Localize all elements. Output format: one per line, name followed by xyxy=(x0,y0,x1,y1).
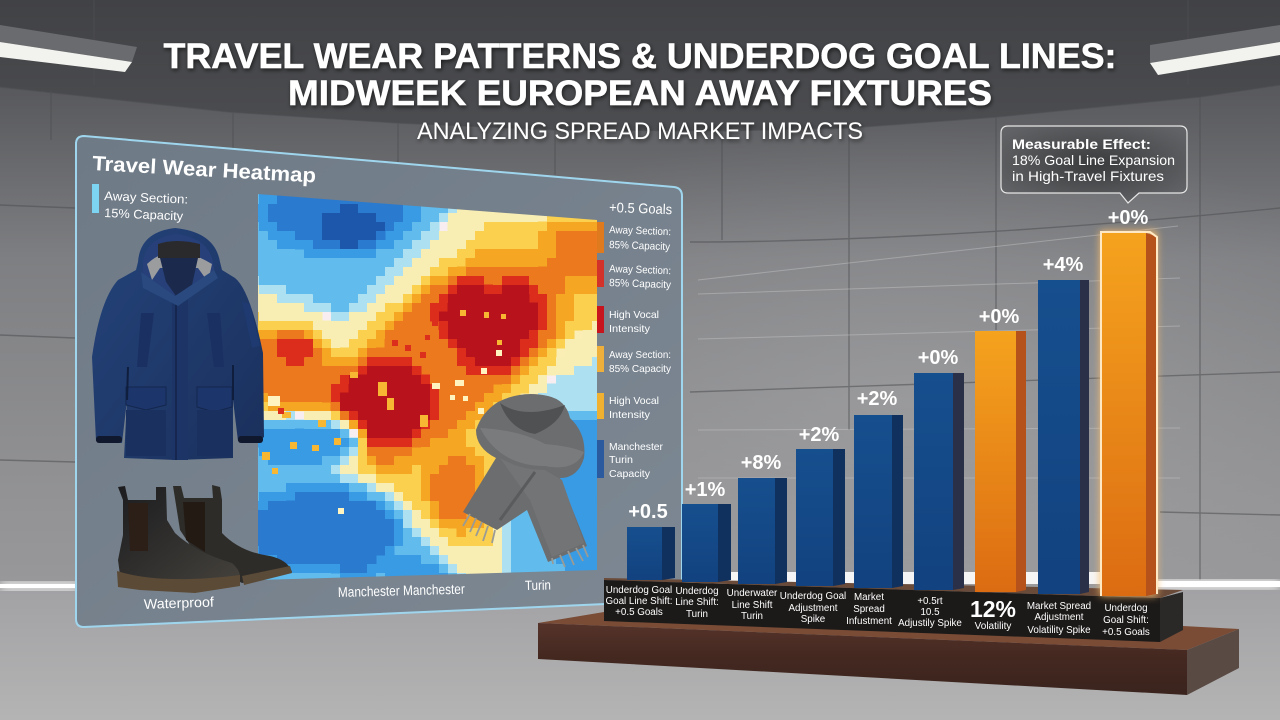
panel: travel wear heatmap xyxy=(76,136,682,627)
label: column 1: Underdog Goal xyxy=(606,585,672,596)
label: column 7: 12% xyxy=(970,596,1016,622)
legend: high vocal intensity yellow: High Vocal xyxy=(609,395,659,407)
legend: blue capacity: Manchester xyxy=(609,441,663,453)
bar 6: +0%: +0% xyxy=(918,347,959,369)
legend: blue capacity: Turin xyxy=(609,454,633,466)
label: column 4: Adjustment xyxy=(788,603,838,614)
label: column 3: Turin xyxy=(741,611,763,622)
legend: yellow away section: 85% Capacity xyxy=(609,363,672,375)
bar 9: +0% highlighted orange xyxy=(1100,207,1157,596)
title block xyxy=(164,37,1116,145)
legend: orange away section xyxy=(597,222,671,253)
legend: orange away section: Away Section: xyxy=(609,224,671,238)
bar 3: +8% xyxy=(738,452,787,584)
bar 6: +0% xyxy=(914,347,964,590)
legend: red away section: 85% Capacity xyxy=(609,277,672,291)
label: column 2: Underdog xyxy=(675,586,719,597)
legend: red away section: Away Section: xyxy=(609,263,671,277)
panel heading: Travel Wear Heatmap xyxy=(92,152,317,187)
bar 2: +1%: +1% xyxy=(685,479,726,501)
bar 5: +2% xyxy=(854,388,903,588)
bar 8: +4%: +4% xyxy=(1043,254,1084,276)
label: column 8: Adjustment xyxy=(1034,612,1084,623)
faint chart guide lines xyxy=(698,226,1180,478)
label: column 3: Underwater xyxy=(727,588,777,599)
left boot xyxy=(118,486,240,585)
legend: high vocal intensity red: High Vocal xyxy=(609,309,659,321)
axis label: manchester: Manchester Manchester xyxy=(338,581,465,600)
label: column 9: Underdog xyxy=(1104,603,1148,614)
legend: away section 15%: Away Section: xyxy=(104,189,188,207)
heatmap xyxy=(258,194,597,580)
scattered hot pixels xyxy=(262,310,506,474)
bar 1: +0.5: +0.5 xyxy=(628,501,668,523)
label: column 1: Goal Line Shift: xyxy=(606,596,672,607)
label: column 9: Goal Shift: xyxy=(1103,615,1149,626)
bar 9: +0% highlighted orange: +0% xyxy=(1108,207,1149,229)
bar 7: +0% orange xyxy=(975,306,1026,592)
bar 1: +0.5 xyxy=(627,501,675,580)
label: column 5: Spread xyxy=(853,604,885,615)
subtitle: ANALYZING SPREAD MARKET IMPACTS xyxy=(417,118,863,145)
bar 4: +2% xyxy=(796,424,845,586)
icon: boots xyxy=(117,485,292,593)
callout: measurable effect xyxy=(1001,126,1187,203)
legend: yellow away section xyxy=(597,346,672,375)
icon: jacket xyxy=(92,228,264,460)
legend: high vocal intensity red: Intensity xyxy=(609,323,651,335)
legend: red away section xyxy=(597,260,672,291)
bar 4: +2%: +2% xyxy=(799,424,840,446)
bar 2: +1% xyxy=(682,479,731,582)
label: column 6: +0.5rt xyxy=(917,596,943,607)
legend: away section 15%: 15% Capacity xyxy=(104,206,184,223)
label: column 9: +0.5 Goals xyxy=(1102,627,1150,638)
panel: black label base xyxy=(604,578,1183,642)
legend: plus 0.5 goals: +0.5 Goals xyxy=(609,199,672,217)
icon: scarf xyxy=(463,394,588,567)
bar labels on base xyxy=(606,585,1150,638)
ceiling xyxy=(0,0,1280,131)
right boot xyxy=(173,485,292,583)
label: column 6: 10.5 xyxy=(920,607,940,618)
legend: blue capacity: Capacity xyxy=(609,468,651,480)
label: column 7: Volatility xyxy=(975,621,1011,632)
title line 1: TRAVEL WEAR PATTERNS & UNDERDOG GOAL LINES: xyxy=(164,37,1116,76)
label: column 4: Underdog Goal xyxy=(780,591,846,602)
legend: high vocal intensity yellow xyxy=(597,393,659,421)
label: column 2: Turin xyxy=(686,609,708,620)
bar 5: +2%: +2% xyxy=(857,388,898,410)
bar 8: +4% xyxy=(1038,254,1089,594)
label: column 2: Line Shift: xyxy=(675,597,719,608)
ceiling light: left xyxy=(0,25,137,72)
label: column 6: Adjustily Spike xyxy=(898,618,962,629)
legend: high vocal intensity yellow: Intensity xyxy=(609,409,651,421)
label: column 1: +0.5 Goals xyxy=(615,607,663,618)
label: column 5: Market xyxy=(854,592,884,603)
label: column 8: Market Spread xyxy=(1027,601,1091,612)
legend: yellow away section: Away Section: xyxy=(609,349,671,361)
axis label: waterproof: Waterproof xyxy=(144,594,214,612)
bar 3: +8%: +8% xyxy=(741,452,782,474)
legend: blue capacity xyxy=(597,440,663,480)
glass panel xyxy=(76,136,682,627)
callout: measurable effect: 18% Goal Line Expansion xyxy=(1012,152,1175,168)
title line 2: MIDWEEK EUROPEAN AWAY FIXTURES xyxy=(288,74,992,113)
legend: orange away section: 85% Capacity xyxy=(609,239,671,253)
legend: high vocal intensity red xyxy=(597,306,659,335)
label: column 4: Spike xyxy=(801,614,826,625)
legend: away section 15% xyxy=(92,184,188,223)
callout: measurable effect: Measurable Effect: xyxy=(1012,136,1151,152)
label: column 8: Volatility Spike xyxy=(1027,625,1091,636)
bar 7: +0% orange: +0% xyxy=(979,306,1020,328)
axis label: turin: Turin xyxy=(525,578,551,593)
panel: wooden plinth xyxy=(538,612,1239,695)
floor xyxy=(0,572,1280,720)
callout: measurable effect: in High-Travel Fixtures xyxy=(1012,168,1164,184)
label: column 5: Infustment xyxy=(846,616,892,627)
bar chart xyxy=(627,207,1157,596)
label: column 3: Line Shift xyxy=(732,600,773,611)
ceiling light: right xyxy=(1150,25,1280,75)
